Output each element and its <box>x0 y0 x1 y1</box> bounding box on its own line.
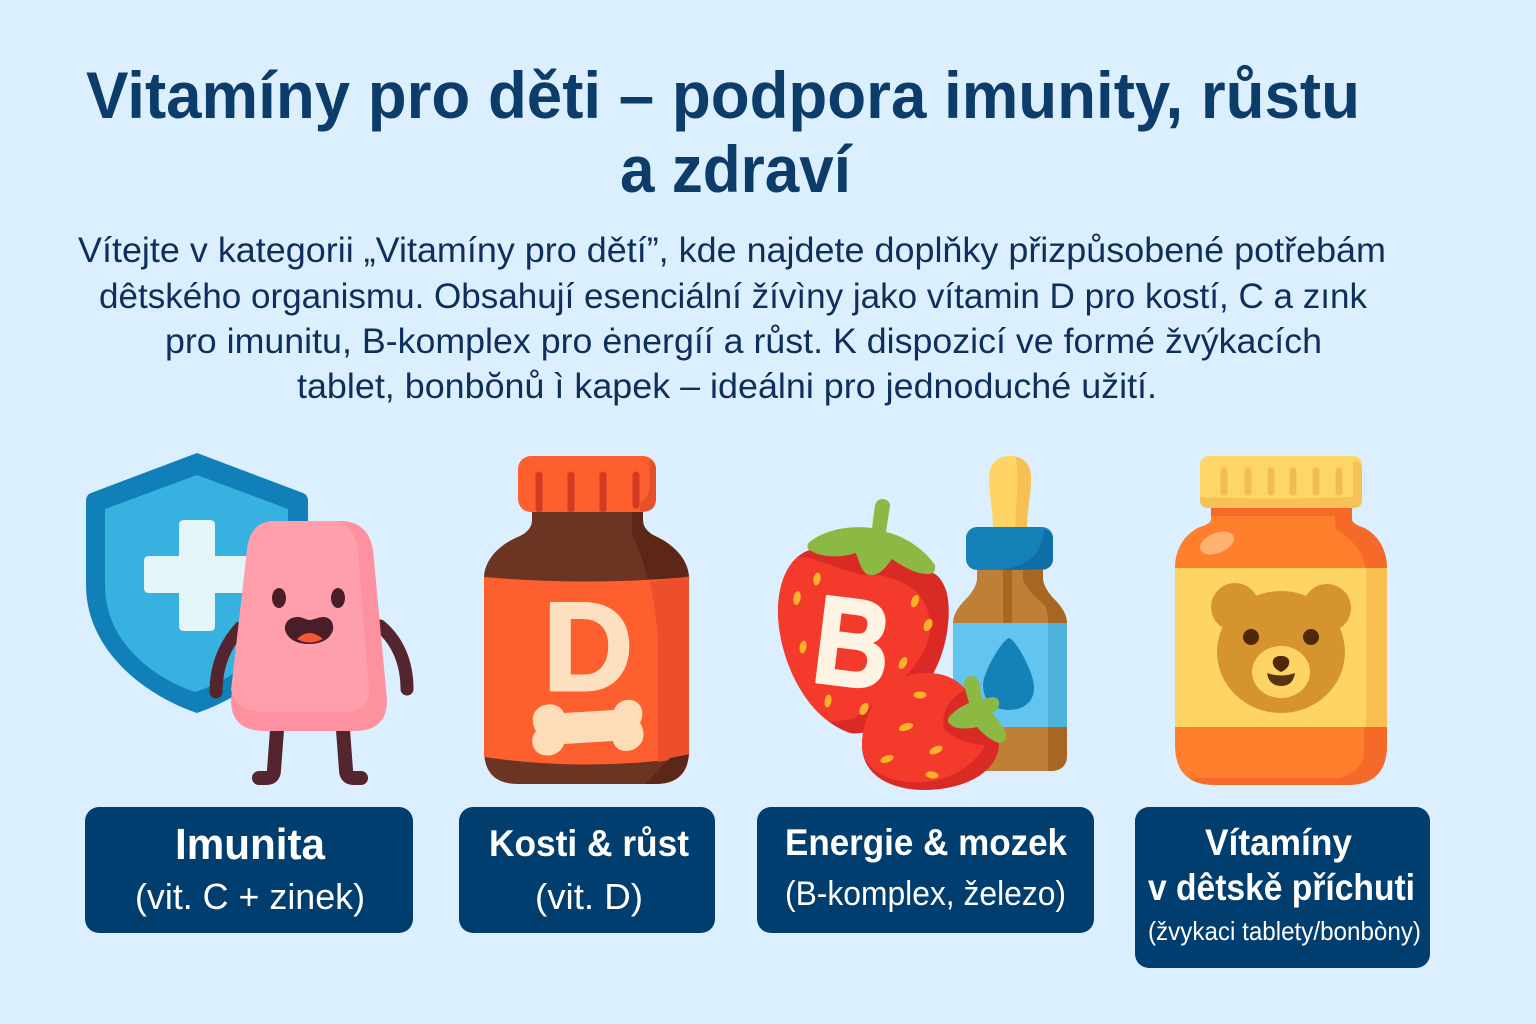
card: Kosti a růst <box>459 807 715 933</box>
card: Energie a mozek: Energie & mozek <box>785 822 1067 863</box>
icon: strawberry with letter B <box>770 499 949 733</box>
icon: gummy character <box>216 521 407 778</box>
intro text block: tablet, bonbŏnů ì kapek – ideálni pro jednoduché užití. <box>297 367 1157 406</box>
card: Energie a mozek: (B-komplex, železo) <box>785 875 1066 913</box>
face <box>272 588 345 644</box>
card: Imunita: Imunita <box>175 820 326 869</box>
title: Vitamíny pro děti – podpora imunity, růstu <box>86 58 1360 132</box>
card: Vítamíny v dětské příchuti: (žvykaci tablety/bonbòny) <box>1148 916 1421 946</box>
intro text block: pro imunitu, B-komplex pro ėnergíí a růst. K dispozicí ve formé žvýkacích <box>165 322 1322 361</box>
cap <box>518 456 656 512</box>
intro text block: dêtského organismu. Obsahují esenciální žívìny jako vítamin D pro kostí, C a zınk <box>99 277 1367 316</box>
seeds <box>792 572 934 717</box>
card: Energie a mozek <box>757 807 1094 933</box>
water drop <box>983 638 1034 710</box>
card: Vítamíny v dětské příchuti: Vítamíny <box>1205 822 1352 863</box>
bone <box>532 700 644 756</box>
card: Vítamíny v dětské příchuti: v dêtskě příchuti <box>1148 867 1415 908</box>
title: a zdraví <box>620 132 853 206</box>
icon: small strawberry <box>862 673 1006 790</box>
cap <box>1200 456 1362 508</box>
bear face <box>1211 583 1351 713</box>
arms <box>216 626 407 692</box>
card: Imunita: (vit. C + zinek) <box>135 876 365 917</box>
icon: dropper bottle <box>953 456 1070 771</box>
legs <box>259 730 361 778</box>
card: Kosti a růst: Kosti & růst <box>489 823 689 864</box>
card: Kosti a růst: (vit. D) <box>535 876 643 917</box>
letter B: B <box>806 570 899 717</box>
icon: bear vitamin jar <box>1175 456 1400 790</box>
leaves <box>807 499 935 575</box>
intro text block <box>78 231 1386 406</box>
card: Imunita <box>85 807 413 933</box>
title <box>86 58 1360 206</box>
icon: shield with cross <box>86 453 308 713</box>
intro text block: Vítejte v kategorii „Vitamíny pro dětí”, kde najdete doplňky přizpůsobené potřebám <box>78 231 1386 270</box>
body <box>231 521 387 731</box>
icon: vitamin D bottle <box>484 456 700 784</box>
letter D: D <box>543 578 633 717</box>
card: Vítamíny v dětské příchuti <box>1135 807 1430 968</box>
